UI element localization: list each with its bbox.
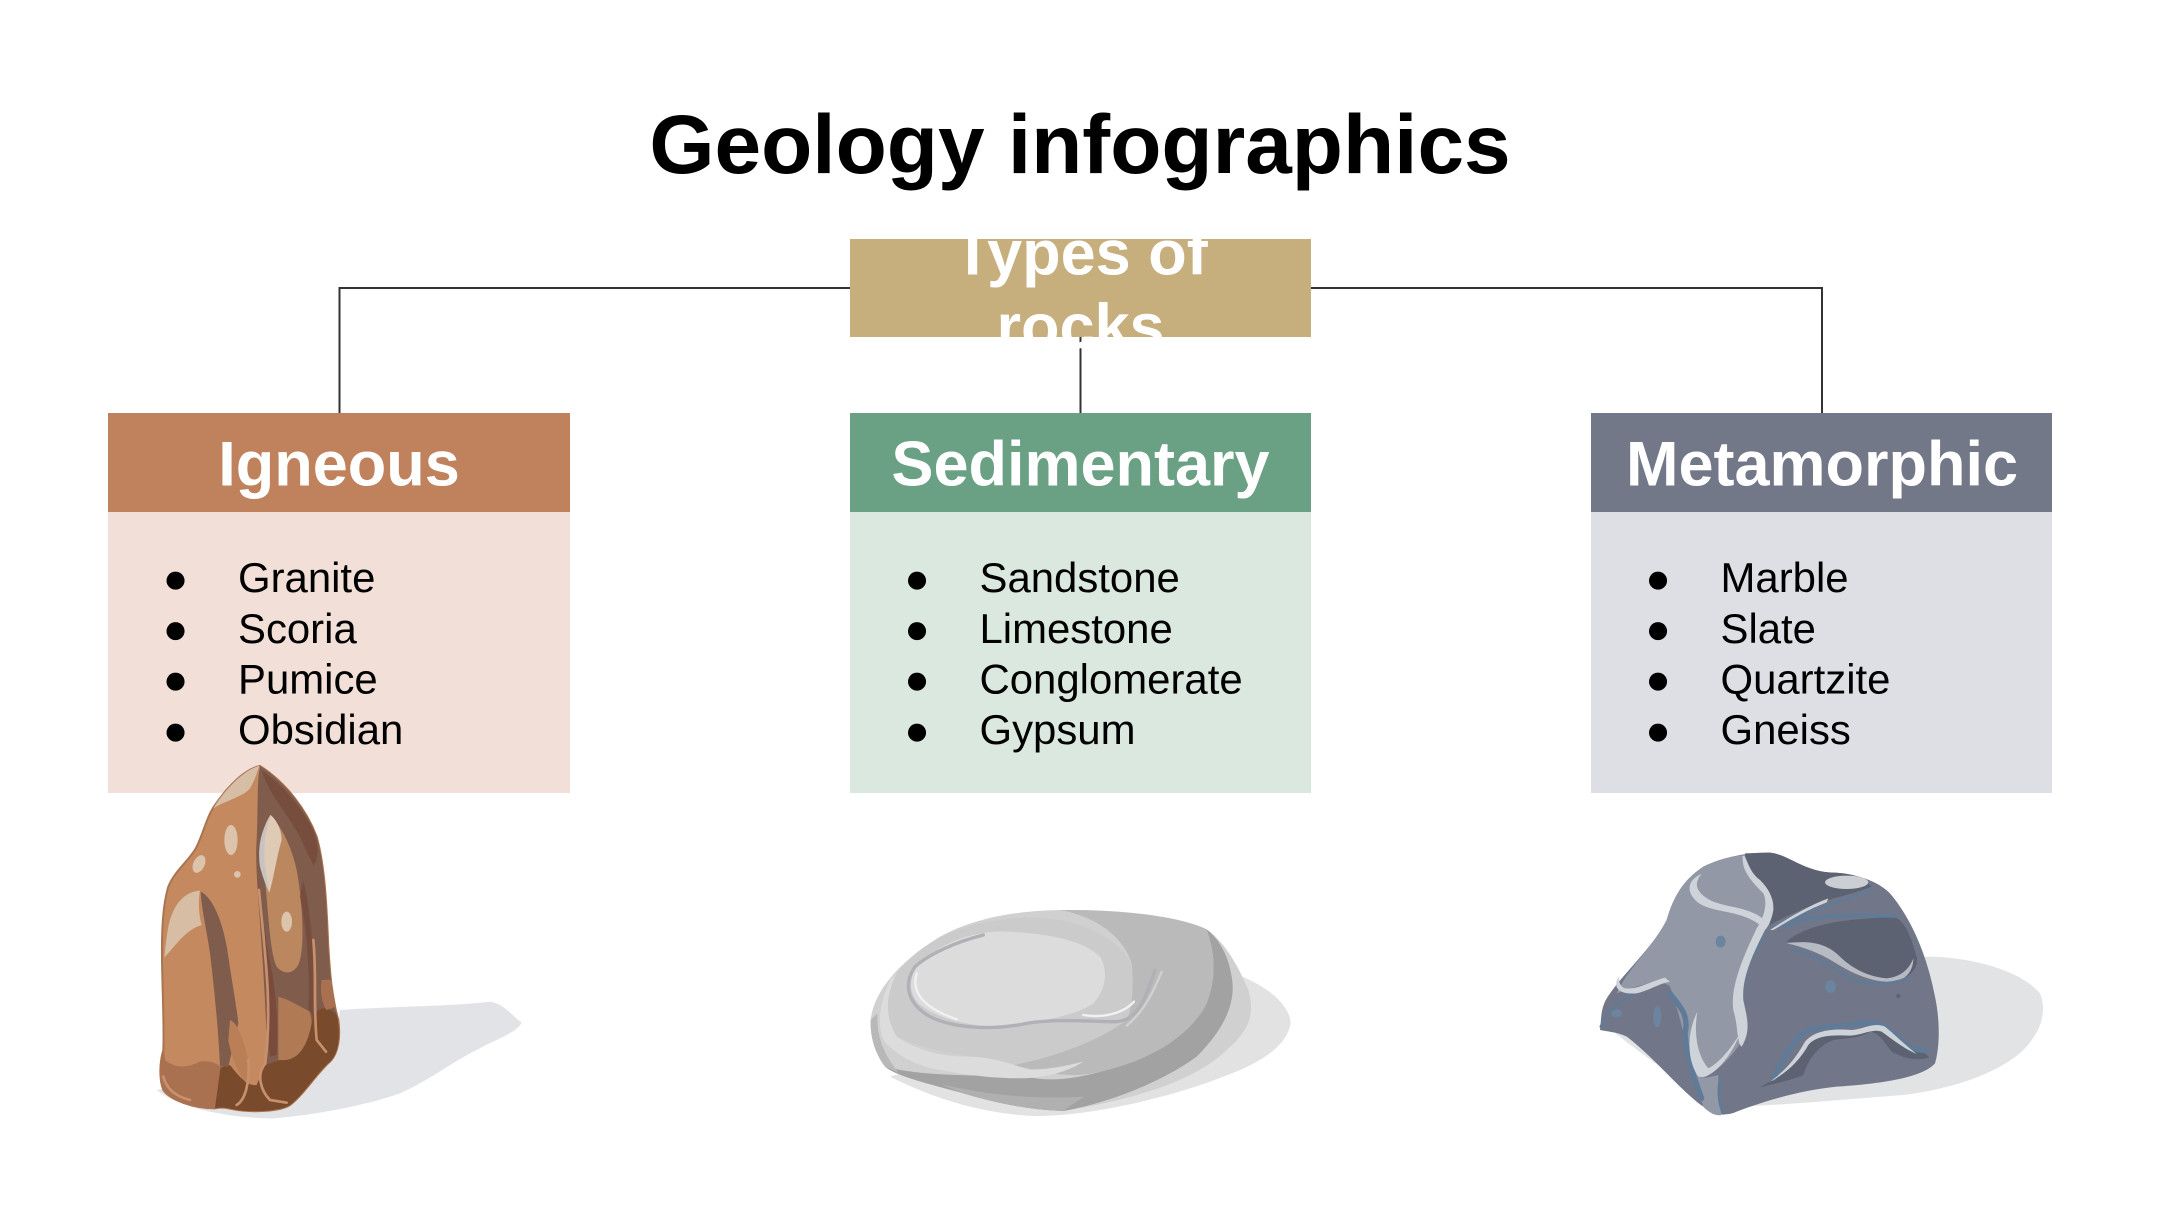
panel: igneous: Pumice (238, 656, 378, 702)
panel: sedimentary: Sedimentary (891, 430, 1270, 500)
panel: igneous: Igneous (218, 430, 460, 500)
panel: sedimentary: Sandstone (980, 554, 1180, 601)
panel: igneous (108, 413, 570, 793)
panel: sedimentary: ● (904, 554, 930, 602)
panel: sedimentary: Limestone (980, 605, 1173, 652)
panel: metamorphic: Gneiss (1720, 706, 1851, 753)
panel: metamorphic: ● (1645, 605, 1671, 652)
panel: sedimentary: ● (904, 605, 930, 652)
icon: metamorphic rock (1600, 853, 2043, 1115)
title: Geology infographics (649, 97, 1511, 191)
panel: sedimentary: Conglomerate (980, 656, 1243, 702)
panel: metamorphic (1591, 413, 2052, 793)
panel: igneous: Granite (238, 554, 375, 601)
connector lines (340, 288, 1822, 413)
panel: igneous: ● (163, 656, 188, 702)
panel: metamorphic: Metamorphic (1626, 430, 2018, 500)
panel: igneous: ● (163, 554, 188, 602)
box: types of rocks (850, 218, 1311, 362)
box: types of rocks: rocks (996, 292, 1165, 362)
panel: sedimentary: ● (904, 706, 930, 754)
panel: igneous: ● (163, 605, 188, 652)
panel: sedimentary: Gypsum (980, 706, 1135, 753)
panel: igneous: Scoria (238, 605, 357, 652)
icon: sedimentary rock (871, 910, 1291, 1116)
panel: metamorphic: Marble (1720, 554, 1849, 601)
panel: metamorphic: Slate (1720, 605, 1816, 652)
icon: igneous rock (157, 766, 522, 1118)
box: types of rocks: Types of (953, 218, 1209, 288)
panel: metamorphic: ● (1645, 554, 1671, 602)
panel: igneous: Obsidian (238, 706, 403, 753)
panel: sedimentary (850, 413, 1311, 793)
panel: metamorphic: Quartzite (1720, 656, 1890, 702)
panel: igneous: ● (163, 706, 188, 754)
panel: sedimentary: ● (904, 656, 930, 702)
panel: metamorphic: ● (1645, 656, 1671, 702)
panel: metamorphic: ● (1645, 706, 1671, 754)
